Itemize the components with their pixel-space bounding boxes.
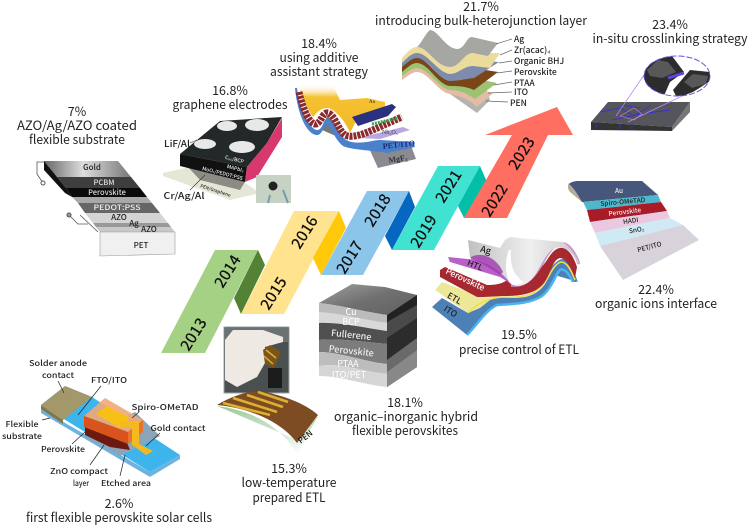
panel: organic-inorganic hybrid (319, 284, 478, 439)
segment: 2022-2023 arrow (464, 107, 573, 218)
caption (375, 0, 587, 29)
caption (172, 80, 288, 113)
segment: 2017-2018 (321, 191, 409, 275)
panel: in-situ crosslinking (591, 14, 748, 131)
panel: low-temperature ETL (217, 327, 337, 506)
panel: AZO/Ag/AZO substrate (17, 101, 175, 256)
layer block: BCP (342, 315, 360, 328)
caption (334, 392, 478, 439)
layer block: ITO/PET (332, 368, 367, 381)
year labels: 2017 (330, 236, 368, 278)
layer stack: Ag (129, 218, 139, 229)
timeline ribbon arrow (161, 107, 573, 355)
inset photo (256, 175, 291, 203)
device labels: substrate (2, 431, 43, 442)
caption: using additive (280, 47, 359, 66)
device illustration (163, 117, 291, 203)
layer labels with arrows: ITO (514, 86, 528, 98)
layer labels with arrows: Zr(acac)₄ (514, 44, 551, 56)
caption: 18.1% (387, 392, 423, 411)
wave illustration (295, 85, 416, 168)
bent layer stack: Perovskite (608, 204, 642, 218)
device labels: Etched area (101, 478, 151, 489)
caption: prepared ETL (252, 487, 326, 506)
caption: introducing bulk-heterojunction layer (375, 10, 587, 29)
device illustration: PEN/Graphene (199, 182, 232, 199)
caption: 7% (68, 101, 87, 120)
year labels: 2016 (285, 211, 323, 253)
panel: organic ions interface (568, 181, 717, 312)
year labels: 2022 (475, 179, 513, 221)
bent layer stack: HADI (622, 214, 639, 226)
device labels: Spiro-OMeTAD (132, 402, 199, 413)
caption (26, 493, 212, 526)
device labels (2, 358, 206, 489)
layer stack: PEDOT:PSS (94, 202, 141, 213)
layer labels with arrows: PTAA (514, 77, 535, 89)
bent layer stack: PET/ITO (636, 238, 663, 254)
bent layer stack: ITO (441, 303, 460, 320)
caption: organic ions interface (595, 293, 717, 312)
layer stack (37, 161, 175, 256)
layer block: Fullerene (331, 326, 372, 343)
device illustration: MoOₓ/PEDOT:PSS (201, 165, 243, 182)
caption: 18.4% (301, 33, 337, 52)
bent layer stack: ETL (445, 289, 464, 307)
panel: graphene electrodes (163, 80, 291, 203)
photo of hand holding device (224, 327, 289, 393)
caption (459, 324, 579, 358)
layer stack: PET (134, 240, 149, 251)
panel: 2013 first flexible cell (2, 358, 212, 526)
panel: precise control of ETL (432, 237, 580, 358)
device illustration (41, 381, 180, 477)
layer block (319, 284, 417, 387)
bent layer stack (568, 181, 699, 280)
caption: organic–inorganic hybrid (334, 406, 478, 425)
device labels: Flexible (6, 419, 39, 430)
layer labels: Au (615, 185, 623, 195)
device labels: Solder anode (29, 358, 88, 369)
caption (592, 14, 748, 47)
device illustration: MAPbI₃ (226, 163, 245, 174)
panel: bulk-heterojunction layer (375, 0, 587, 113)
layer labels: Au (369, 100, 376, 105)
caption: 22.4% (638, 279, 674, 298)
PEN device: PEN (296, 428, 315, 446)
bent layer stack: SnO₂ (628, 223, 645, 235)
caption: in-situ crosslinking strategy (592, 28, 748, 47)
year labels: 2013 (174, 313, 212, 355)
device labels: FTO/ITO (91, 375, 127, 386)
callout leaders (42, 381, 160, 476)
device labels: layer (73, 478, 90, 489)
wave illustration: MgF₂ (388, 153, 408, 165)
segment: 2013-2014 (161, 250, 258, 353)
layer labels with arrows: Perovskite (514, 66, 557, 78)
layer stack: AZO (111, 212, 127, 223)
wave illustration: PET/ITO (382, 139, 415, 151)
year labels: 2014 (208, 250, 246, 292)
year labels: 2021 (429, 165, 467, 207)
year labels: 2015 (254, 272, 292, 314)
caption: flexible perovskites (352, 420, 458, 439)
bent layer stack: HTL (465, 257, 485, 274)
year labels (174, 132, 540, 355)
caption: low-temperature (242, 472, 337, 491)
caption (270, 33, 368, 80)
caption: 2.6% (105, 493, 134, 512)
panel: additive assistant strategy (270, 33, 416, 168)
device labels: Perovskite (41, 444, 86, 455)
wave illustration: Nb₂O₅ (382, 130, 398, 136)
caption: 15.3% (271, 458, 307, 477)
caption: AZO/Ag/AZO coated (17, 115, 137, 134)
year labels: 2019 (404, 210, 442, 252)
wave layer stack (402, 30, 500, 113)
caption: first flexible perovskite solar cells (26, 507, 212, 526)
year labels: 2018 (358, 189, 396, 231)
device labels: ZnO compact (50, 466, 109, 477)
bent layer stack: Perovskite (444, 265, 487, 294)
bent layer stack: Spiro-OMeTAD (600, 194, 646, 208)
layer labels with arrows: Ag (514, 33, 524, 45)
layer block: PTAA (337, 357, 359, 370)
year labels: 2023 (502, 132, 540, 174)
device illustration: Cr/Ag/Al (164, 189, 205, 202)
segment: 2019-2021 (392, 166, 480, 250)
layer stack: Perovskite (88, 187, 126, 198)
device illustration: C₆₀/BCP (224, 154, 244, 165)
layer labels with arrows: Organic BHJ (514, 55, 564, 67)
film with magnified inset (591, 54, 712, 131)
caption: 19.5% (501, 324, 537, 343)
caption: assistant strategy (270, 61, 368, 80)
layer stack: AZO (141, 224, 157, 235)
segment: 2015-2016 (241, 211, 339, 314)
layer labels: Cu (345, 305, 357, 318)
layer stack: PCBM (94, 177, 114, 188)
caption (595, 279, 717, 312)
layer labels: Gold (83, 162, 101, 173)
layer block: Perovskite (328, 342, 375, 359)
caption (242, 458, 337, 506)
layer labels: Ag (479, 242, 494, 258)
caption: 16.8% (212, 80, 248, 99)
bent layer stack (432, 237, 580, 335)
caption: graphene electrodes (172, 94, 288, 113)
electrode labels: LiF/Al (164, 137, 190, 150)
caption: precise control of ETL (459, 339, 579, 358)
caption: 23.4% (652, 14, 688, 33)
PEN device (217, 391, 318, 454)
caption: flexible substrate (29, 129, 125, 148)
device labels: contact (42, 370, 75, 381)
layer labels with arrows: PEN (510, 97, 527, 109)
caption (17, 101, 137, 148)
device labels: Gold contact (150, 423, 206, 434)
layer labels with arrows (486, 33, 564, 109)
